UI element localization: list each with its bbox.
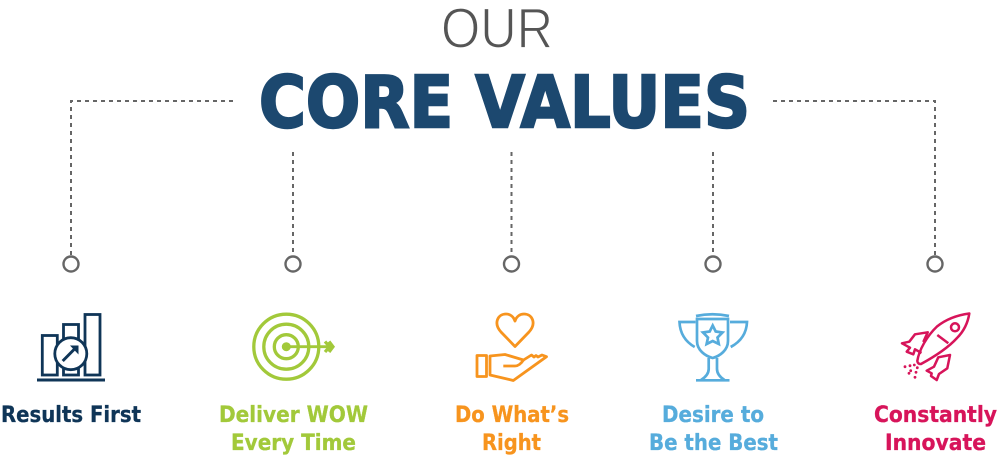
title: CORE VALUES: CORE VALUES — [259, 61, 750, 144]
label: Do What's Right — [455, 403, 569, 456]
connector: do what's right — [504, 152, 519, 272]
label: Desire to Be the Best: Be the Best — [649, 431, 778, 456]
label: Deliver WOW Every Time — [219, 403, 368, 456]
icon: bar chart with arrow — [37, 314, 105, 380]
label: Constantly Innovate — [874, 403, 997, 456]
label: Results First: Results First — [1, 403, 141, 428]
connector: desire to be the best — [706, 152, 720, 272]
label: Deliver WOW Every Time: Every Time — [231, 431, 356, 456]
connector: results first — [64, 101, 233, 272]
label: Desire to Be the Best: Desire to — [662, 403, 764, 428]
icon: rocket — [902, 314, 969, 380]
label: Deliver WOW Every Time: Deliver WOW — [219, 403, 368, 428]
connector: deliver wow — [286, 152, 300, 272]
icon: trophy with star — [680, 314, 747, 380]
label: Constantly Innovate: Innovate — [885, 431, 986, 456]
connector: constantly innovate — [773, 101, 942, 272]
icon: hand holding heart — [477, 314, 546, 380]
label: Do What's Right: Right — [482, 431, 541, 456]
icon: target with arrow — [254, 314, 333, 379]
label: Do What's Right: Do What’s — [455, 403, 569, 428]
label: Desire to Be the Best — [649, 403, 778, 456]
